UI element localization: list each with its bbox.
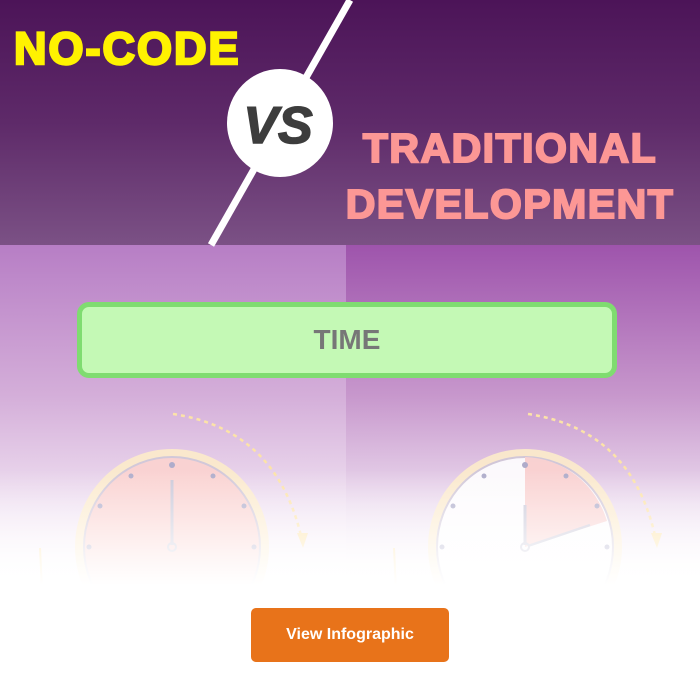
clock: right: [428, 449, 622, 645]
button: View Infographic: View Infographic: [286, 626, 414, 643]
title: TRADITIONAL DEVELOPMENT: DEVELOPMENT: [346, 181, 674, 227]
arrow: left dotted arc: [173, 414, 303, 545]
title: TRADITIONAL DEVELOPMENT: [346, 125, 674, 227]
button: View Infographic: [251, 608, 449, 662]
panel: left no-code: [0, 245, 346, 700]
panel: right traditional: [346, 245, 700, 700]
icon: vs circle: VS: [243, 97, 313, 155]
heading: TIME: [77, 302, 617, 378]
title: NO-CODE: NO-CODE: [14, 23, 240, 74]
header background: [0, 0, 700, 245]
icon: vs circle: [227, 69, 333, 177]
title: TRADITIONAL DEVELOPMENT: TRADITIONAL: [363, 125, 657, 171]
heading: TIME: TIME: [314, 324, 380, 355]
fade overlay: [0, 470, 700, 700]
clock: left: [75, 449, 269, 645]
arrow: right dotted arc: [528, 414, 657, 545]
